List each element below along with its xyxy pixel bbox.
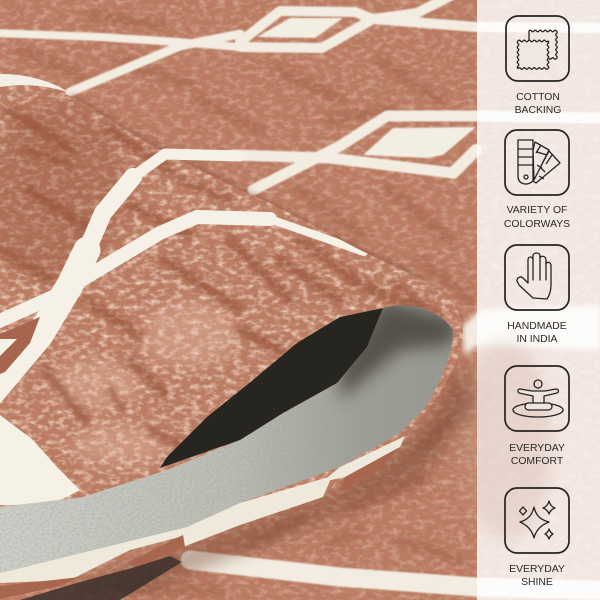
rug: fold lattice <box>0 177 364 392</box>
rug: white band on fold crest <box>0 74 68 92</box>
icon: open hand <box>505 245 569 310</box>
panel: translucent feature column <box>477 0 600 600</box>
rug: fold pile streaks <box>0 110 440 445</box>
rug: folded front face <box>0 85 463 519</box>
icon: colour fan deck <box>505 130 569 195</box>
label: everyday shine: SHINE <box>521 577 553 588</box>
rug: cream underside edge <box>0 436 405 583</box>
icon: meditating figure <box>505 366 569 431</box>
label: handmade in india: HANDMADE <box>507 321 567 332</box>
rug: cream diamonds <box>257 18 476 158</box>
icon: fabric swatches <box>506 16 569 81</box>
label: cotton backing: COTTON <box>516 92 560 103</box>
feature: everyday comfort <box>505 366 569 467</box>
rug: white band right of fold <box>462 305 600 355</box>
label: handmade in india: IN INDIA <box>516 334 558 345</box>
rug: diagonal pile streaks <box>20 15 470 590</box>
feature: everyday shine <box>505 488 569 588</box>
rug: shaded inner curl <box>340 300 460 400</box>
feature: cotton backing <box>506 16 569 116</box>
rug: brown patches below edge <box>0 447 400 599</box>
rug: shadow under fold <box>60 360 480 590</box>
rug: grey backing <box>0 300 460 580</box>
rug: dark floor shadow <box>20 556 182 600</box>
label: everyday shine: EVERYDAY <box>509 564 565 575</box>
label: everyday comfort: COMFORT <box>511 456 564 467</box>
label: variety of colorways: VARIETY OF <box>507 205 567 216</box>
panel: pink rug showing through <box>457 340 553 540</box>
rug: lattice line crossing the fold crest <box>126 154 240 186</box>
rug: pale pile patch <box>50 303 238 465</box>
rug: cream corner <box>0 415 80 506</box>
rug: dark hollow <box>160 308 383 468</box>
feature: variety of colorways <box>504 130 570 230</box>
feature: handmade in india <box>505 245 569 345</box>
label: everyday comfort: EVERYDAY <box>509 443 565 454</box>
icon: sparkles <box>505 488 569 553</box>
rug: shadow along fold crest <box>70 96 462 322</box>
label: variety of colorways: COLORWAYS <box>504 219 570 230</box>
label: cotton backing: BACKING <box>515 105 561 116</box>
rug: darker upper left <box>0 100 125 280</box>
rug: brown pocket with white wedge <box>0 317 40 374</box>
